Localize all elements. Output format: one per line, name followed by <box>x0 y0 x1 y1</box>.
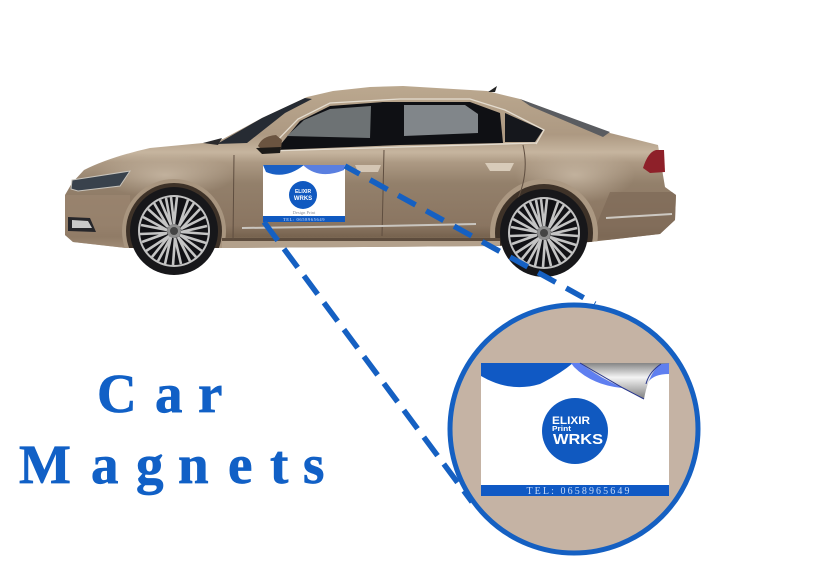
taillight <box>643 150 665 173</box>
rear bumper chrome strip <box>606 214 672 218</box>
body highlights and wheel arches <box>65 159 676 248</box>
front window reflection <box>287 106 371 138</box>
car body <box>65 86 676 248</box>
magnet card <box>481 363 669 496</box>
rear window reflection <box>404 105 478 136</box>
telephone number: TEL: 0658965649 <box>526 486 632 497</box>
title line: Magnets: Magnets <box>19 434 324 495</box>
rear windshield <box>520 99 610 137</box>
dashed zoom line: upper <box>345 166 595 304</box>
sign top wave <box>263 165 304 175</box>
window chrome trim <box>268 99 544 151</box>
logo: WRKS <box>553 431 603 448</box>
logo <box>542 398 608 464</box>
sign bottom bar <box>263 216 345 222</box>
title line: Car: Car <box>97 363 222 424</box>
side windows base <box>276 102 503 150</box>
door magnet sign: TEL: 0658965649 <box>283 217 325 222</box>
front door handle <box>355 165 381 172</box>
headlight <box>71 171 130 191</box>
car <box>65 86 680 287</box>
rear door handle <box>485 163 514 171</box>
roof antenna <box>488 86 497 92</box>
door seams <box>233 145 525 240</box>
magnified circle <box>450 305 698 553</box>
side chrome strip <box>242 224 476 228</box>
title <box>19 363 324 495</box>
front windshield <box>217 98 312 144</box>
card bottom bar <box>481 485 669 496</box>
side mirror <box>258 135 282 153</box>
door magnet sign: ELIXIR <box>295 189 311 195</box>
front fog lamp <box>68 217 96 232</box>
card top wave <box>481 363 573 387</box>
front wheel <box>130 187 218 275</box>
door magnet sign <box>263 165 345 222</box>
sign small caption: Design Print <box>293 210 316 215</box>
dashed zoom line: lower <box>264 222 472 502</box>
card light wave <box>571 363 669 388</box>
infographic canvas <box>20 86 700 556</box>
door magnet sign: WRKS <box>294 196 312 202</box>
logo: Print <box>552 424 572 433</box>
rear wheel <box>500 189 588 277</box>
logo: ELIXIR <box>552 415 590 427</box>
peel corner <box>580 363 671 399</box>
quarter window <box>505 113 543 142</box>
sign logo <box>289 181 317 209</box>
hood vent shadow <box>203 138 222 145</box>
